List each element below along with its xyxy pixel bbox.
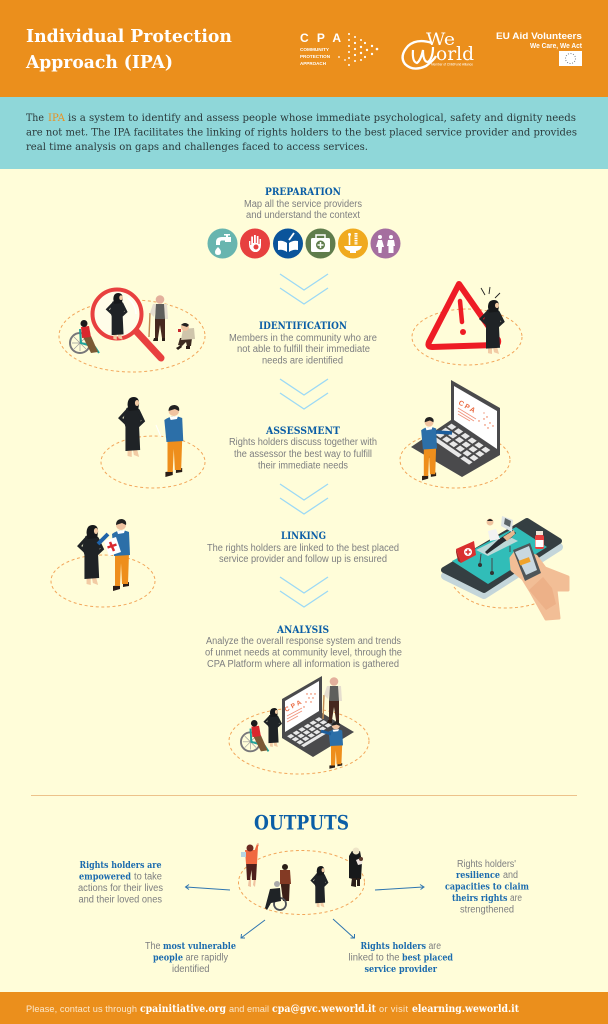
output: resilience [445, 859, 529, 916]
icon: education book [273, 228, 303, 258]
step: analysis text: of unmet needs at community level, through the [205, 648, 402, 658]
step: assessment text: the assessor the best way to fulfill [234, 449, 372, 460]
person typing [421, 417, 452, 480]
output: resilience: and [503, 870, 518, 881]
illustration: identification right [412, 284, 522, 365]
output: resilience: theirs rights [452, 893, 508, 904]
footer: and email [229, 1004, 269, 1014]
woman in black [312, 866, 327, 907]
step: linking text [207, 530, 399, 565]
output: empowered: empowered [79, 872, 131, 882]
heading: outputs: OUTPUTS [254, 810, 349, 834]
illustration: assessment right [400, 380, 510, 488]
logo: WeWorld: We [426, 30, 455, 50]
step: analysis text: ANALYSIS [276, 624, 329, 636]
first aid kit [456, 541, 476, 563]
step: assessment text: ASSESSMENT [265, 425, 340, 437]
man in brown [280, 864, 291, 901]
step: assessment text: Rights holders discuss together with [229, 437, 377, 448]
step: identification text: Members in the community who are [229, 333, 377, 344]
illustration: analysis [229, 676, 369, 774]
step: linking text: service provider and follow up is ensured [219, 554, 387, 565]
logo: EU Aid Volunteers: We Care, We Act [530, 43, 583, 50]
intro text: are not met. The IPA facilitates the linking of rights holders to the best placed service provider and provides [26, 126, 577, 138]
woman [481, 300, 503, 354]
warning triangle [428, 284, 498, 347]
wheelchair person [70, 320, 99, 353]
bed and patient [476, 516, 518, 575]
output: best placed: Rights holders [360, 941, 426, 952]
logo: CPA: C P A [300, 31, 341, 45]
medicine bottle [535, 531, 544, 549]
output: most vulnerable: The [145, 941, 161, 952]
title [25, 26, 232, 73]
alert marks [481, 287, 500, 298]
footer: cpa@gvc.weworld.it [272, 1004, 376, 1015]
footer [0, 992, 608, 1024]
intro text [26, 112, 577, 153]
step: identification text: not able to fulfill their immediate [237, 344, 370, 355]
arrow: bottom left [241, 920, 265, 938]
arrow: left [186, 884, 230, 890]
logo: CPA: APPROACH [300, 61, 326, 66]
step: preparation text: Map all the service providers [244, 199, 362, 210]
icon: protection hand [240, 228, 270, 258]
output: most vulnerable [145, 941, 236, 975]
step: analysis text: CPA Platform where all information is gathered [207, 659, 399, 670]
step: assessment text [229, 425, 377, 472]
output: most vulnerable: are rapidly [186, 952, 228, 964]
footer: cpainitiative.org [140, 1004, 226, 1015]
output: best placed [348, 941, 453, 975]
step: analysis text [205, 624, 402, 670]
arrow: chevrons 2 [280, 379, 328, 409]
outputs illustration [238, 843, 364, 914]
output: best placed: are [428, 941, 441, 952]
illustration: linking right phone [444, 516, 568, 619]
logo: CPA: PROTECTION [300, 54, 330, 59]
output: best placed: best placed [402, 952, 453, 964]
output: best placed: service provider [364, 964, 438, 975]
intro text: The [26, 112, 44, 124]
output: resilience: resilience [456, 870, 500, 881]
panel: header [0, 0, 608, 97]
step: assessment text: their immediate needs [258, 460, 348, 472]
step: preparation text [244, 186, 362, 221]
logo: CPA: COMMUNITY [300, 47, 329, 52]
footer: Please, contact us through [26, 1004, 137, 1014]
wheelchair elder [265, 881, 286, 910]
footer: or visit [379, 1004, 408, 1014]
arrow: chevrons 4 [280, 577, 328, 607]
logo: WeWorld: orld [436, 43, 474, 65]
step: analysis text: Analyze the overall response system and trends [206, 636, 401, 647]
output: resilience: Rights holders' [457, 859, 516, 870]
step: preparation text: PREPARATION [265, 186, 341, 198]
divider [31, 795, 577, 796]
step: identification text [229, 320, 377, 366]
logo: CPA [300, 31, 378, 66]
magnifier [92, 290, 161, 358]
hand holding phone [511, 543, 568, 619]
icon: people [370, 228, 400, 258]
step: preparation text: and understand the context [246, 210, 360, 221]
footer: elearning.weworld.it [412, 1004, 519, 1015]
logo: EU Aid Volunteers [496, 31, 583, 66]
logo: WeWorld: Member of ChildFund Alliance [431, 62, 473, 66]
output: empowered: and their loved ones [78, 894, 162, 906]
output: empowered: to take [134, 872, 162, 882]
arrow: chevrons 3 [280, 484, 328, 514]
sitting man [176, 323, 195, 350]
output: most vulnerable: identified [172, 964, 210, 975]
output: resilience: are [510, 893, 522, 904]
illustration: linking left [51, 519, 155, 607]
output: most vulnerable: people [153, 952, 183, 964]
output: best placed: linked to the [348, 952, 400, 964]
arrow: chevrons 1 [280, 274, 328, 304]
output: most vulnerable: most vulnerable [163, 941, 236, 952]
illustration: assessment left [101, 397, 205, 488]
step: identification text: needs are identified [262, 356, 343, 366]
laptop: CPA [284, 699, 303, 714]
intro text: is a system to identify and assess people whose immediate psychological, safety and dignity needs [68, 112, 576, 124]
icon: water tap [208, 228, 238, 258]
icons: sectors [208, 228, 400, 258]
illustration: identification left [59, 290, 205, 372]
title: Approach (IPA) [25, 52, 173, 73]
intro text: real time analysis on gaps and challenges faced to access services. [26, 141, 368, 153]
step: linking text: The rights holders are linked to the best placed [207, 543, 399, 554]
step: identification text: IDENTIFICATION [259, 320, 347, 332]
woman raising arm [241, 843, 258, 887]
document [104, 537, 121, 556]
output: resilience: strengthened [460, 904, 514, 916]
phone [444, 521, 559, 595]
logo: WeWorld [403, 30, 474, 69]
laptop: CPA [457, 400, 476, 415]
icon: food bowl [338, 228, 368, 258]
woman with baby [349, 848, 363, 887]
intro text: IPA [48, 112, 65, 124]
logo: EU Aid Volunteers: EU Aid Volunteers [496, 31, 582, 42]
elderly man [149, 295, 168, 341]
woman in magnifier [107, 293, 126, 340]
title: Individual Protection [26, 26, 232, 47]
icon: health kit [306, 228, 336, 258]
output: empowered: actions for their lives [78, 883, 163, 894]
output: empowered: Rights holders are [80, 860, 162, 871]
output: resilience: capacities to claim [445, 882, 529, 892]
output: empowered [78, 860, 163, 906]
arrow: right [375, 884, 424, 890]
step: linking text: LINKING [281, 530, 326, 542]
panel: introduction [0, 97, 608, 169]
arrow: bottom right [333, 919, 354, 938]
